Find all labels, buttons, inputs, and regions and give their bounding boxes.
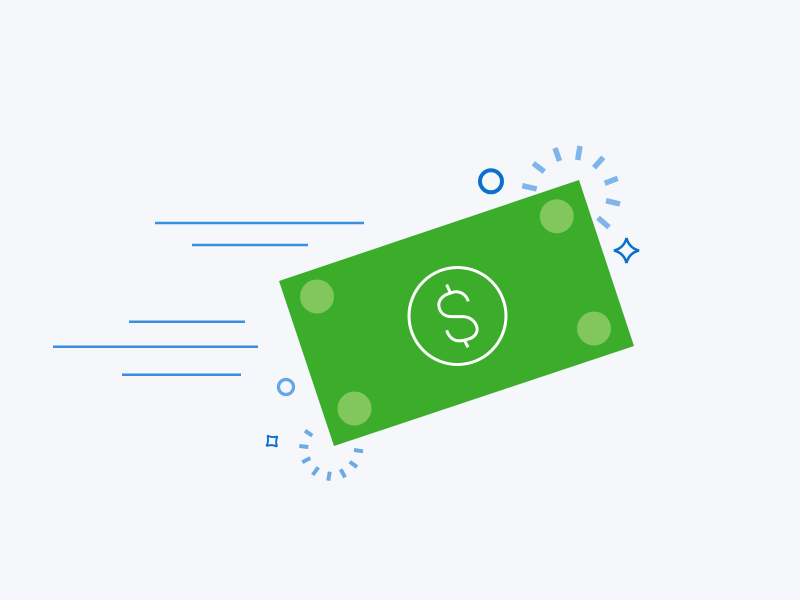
bill corner dots: [300, 199, 611, 426]
small light blue ring: [278, 380, 294, 394]
bill body: [279, 180, 634, 446]
speed lines: [53, 223, 364, 375]
dollar emblem: [409, 268, 506, 364]
large dark blue ring: [480, 170, 502, 192]
lower sparkle burst: [299, 431, 363, 481]
large four-point star: [614, 238, 639, 263]
small four-point star: [266, 436, 278, 446]
upper sparkle burst: [522, 146, 620, 227]
dollar bill: [279, 180, 634, 446]
